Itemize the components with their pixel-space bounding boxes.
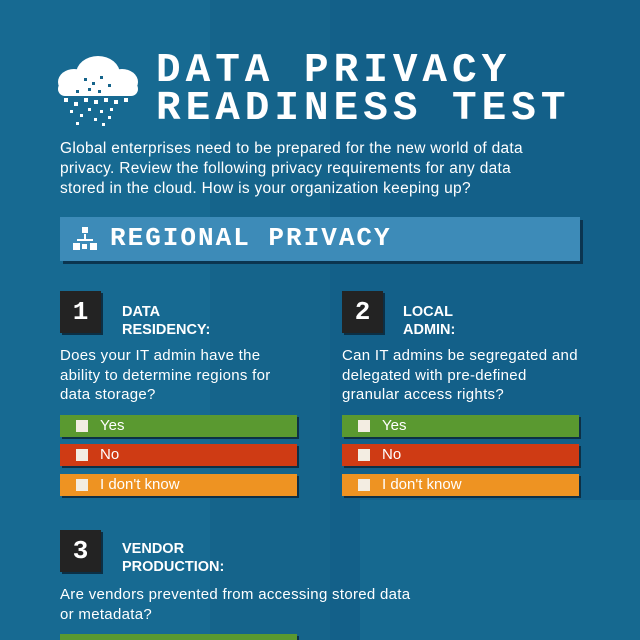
heading 3: PRODUCTION: bbox=[122, 559, 224, 575]
heading 3 bbox=[122, 541, 224, 575]
number 2 bbox=[342, 291, 383, 333]
title: DATA PRIVACY bbox=[156, 48, 511, 94]
question 3 bbox=[60, 530, 410, 640]
heading 2 bbox=[403, 304, 455, 338]
answers 2 bbox=[342, 415, 581, 498]
question 1: No bbox=[100, 446, 119, 463]
number 3: 3 bbox=[73, 536, 88, 566]
question 2 bbox=[342, 291, 581, 498]
question 2: Yes bbox=[382, 417, 406, 434]
question 2: I don't know bbox=[382, 476, 462, 493]
icon: hierarchy bbox=[73, 227, 97, 250]
icon: pixel cloud bbox=[58, 56, 138, 126]
question text 1: Does your IT admin have the ability to determine regions for data storage? bbox=[60, 347, 271, 403]
heading 3: VENDOR bbox=[122, 541, 184, 557]
heading 2: LOCAL bbox=[403, 304, 453, 320]
question text 3: Are vendors prevented from accessing stored data or metadata? bbox=[60, 586, 410, 622]
intro text: Global enterprises need to be prepared for the new world of data privacy. Review the following privacy requirements for any data stored in the cloud. How is your organization keeping up? bbox=[60, 140, 523, 197]
number 1 bbox=[60, 291, 101, 333]
number 3 bbox=[60, 530, 101, 572]
answers 1 bbox=[60, 415, 299, 498]
banner: regional privacy: REGIONAL PRIVACY bbox=[110, 223, 392, 253]
question 1: Yes bbox=[100, 417, 124, 434]
question 2: No bbox=[382, 446, 401, 463]
title: READINESS TEST bbox=[156, 86, 570, 132]
answer bar 3 bbox=[60, 634, 297, 640]
number 1: 1 bbox=[73, 297, 88, 327]
heading 1 bbox=[122, 304, 210, 338]
number 2: 2 bbox=[355, 297, 370, 327]
banner: regional privacy bbox=[60, 217, 580, 261]
heading 2: ADMIN: bbox=[403, 322, 455, 338]
title bbox=[156, 48, 570, 132]
heading 1: RESIDENCY: bbox=[122, 322, 210, 338]
question 1 bbox=[60, 291, 299, 498]
question text 2: Can IT admins be segregated and delegated with pre-defined granular access rights? bbox=[342, 347, 578, 403]
question 1: I don't know bbox=[100, 476, 180, 493]
heading 1: DATA bbox=[122, 304, 160, 320]
